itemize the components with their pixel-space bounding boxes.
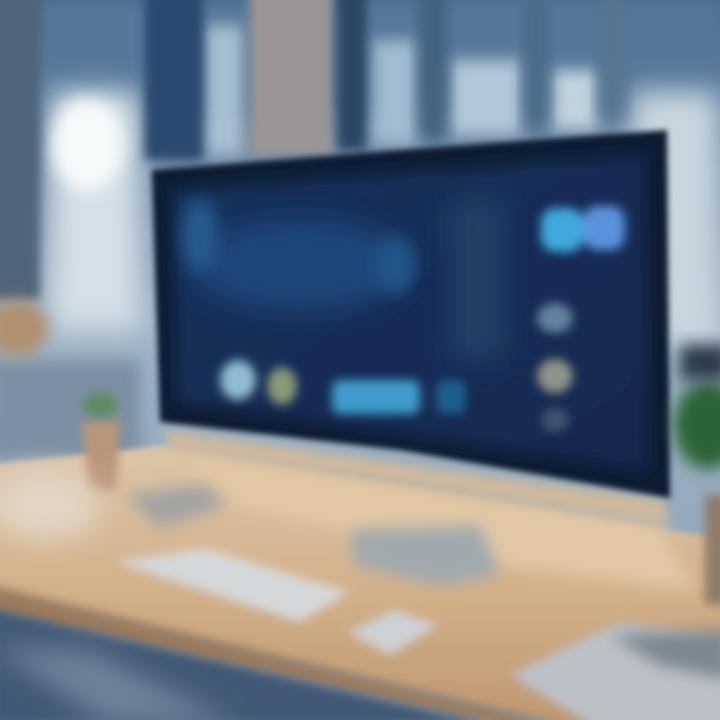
green plant right [674, 381, 720, 469]
floor below the desk [0, 608, 490, 720]
monitor bezel [152, 130, 670, 498]
curtains and window frames [145, 0, 624, 160]
monitor lower edge [165, 430, 668, 525]
right desk object [705, 495, 720, 605]
monitor [152, 130, 670, 525]
notebook on right of desk [510, 622, 720, 720]
screen small tile [537, 303, 573, 333]
papers on left of desk [0, 470, 228, 540]
keyboard [115, 548, 350, 622]
screen bright blue tiles [541, 206, 625, 252]
screen lower widgets [220, 360, 466, 414]
floor highlight [0, 645, 240, 720]
screen [172, 155, 648, 470]
screen right column glow [450, 200, 505, 360]
screen faint tile [541, 408, 569, 432]
screen chart left accent [182, 199, 218, 271]
wooden desk [0, 445, 720, 720]
left wall [0, 0, 140, 460]
screen chart glow [190, 220, 410, 310]
screen beige tile [537, 359, 573, 393]
bread bowl on shelf [0, 300, 48, 356]
monitor stand [350, 525, 500, 585]
dark foliage right [680, 345, 720, 380]
screen chart right accent [375, 237, 415, 293]
mouse [348, 610, 438, 655]
plant pot [82, 392, 120, 490]
